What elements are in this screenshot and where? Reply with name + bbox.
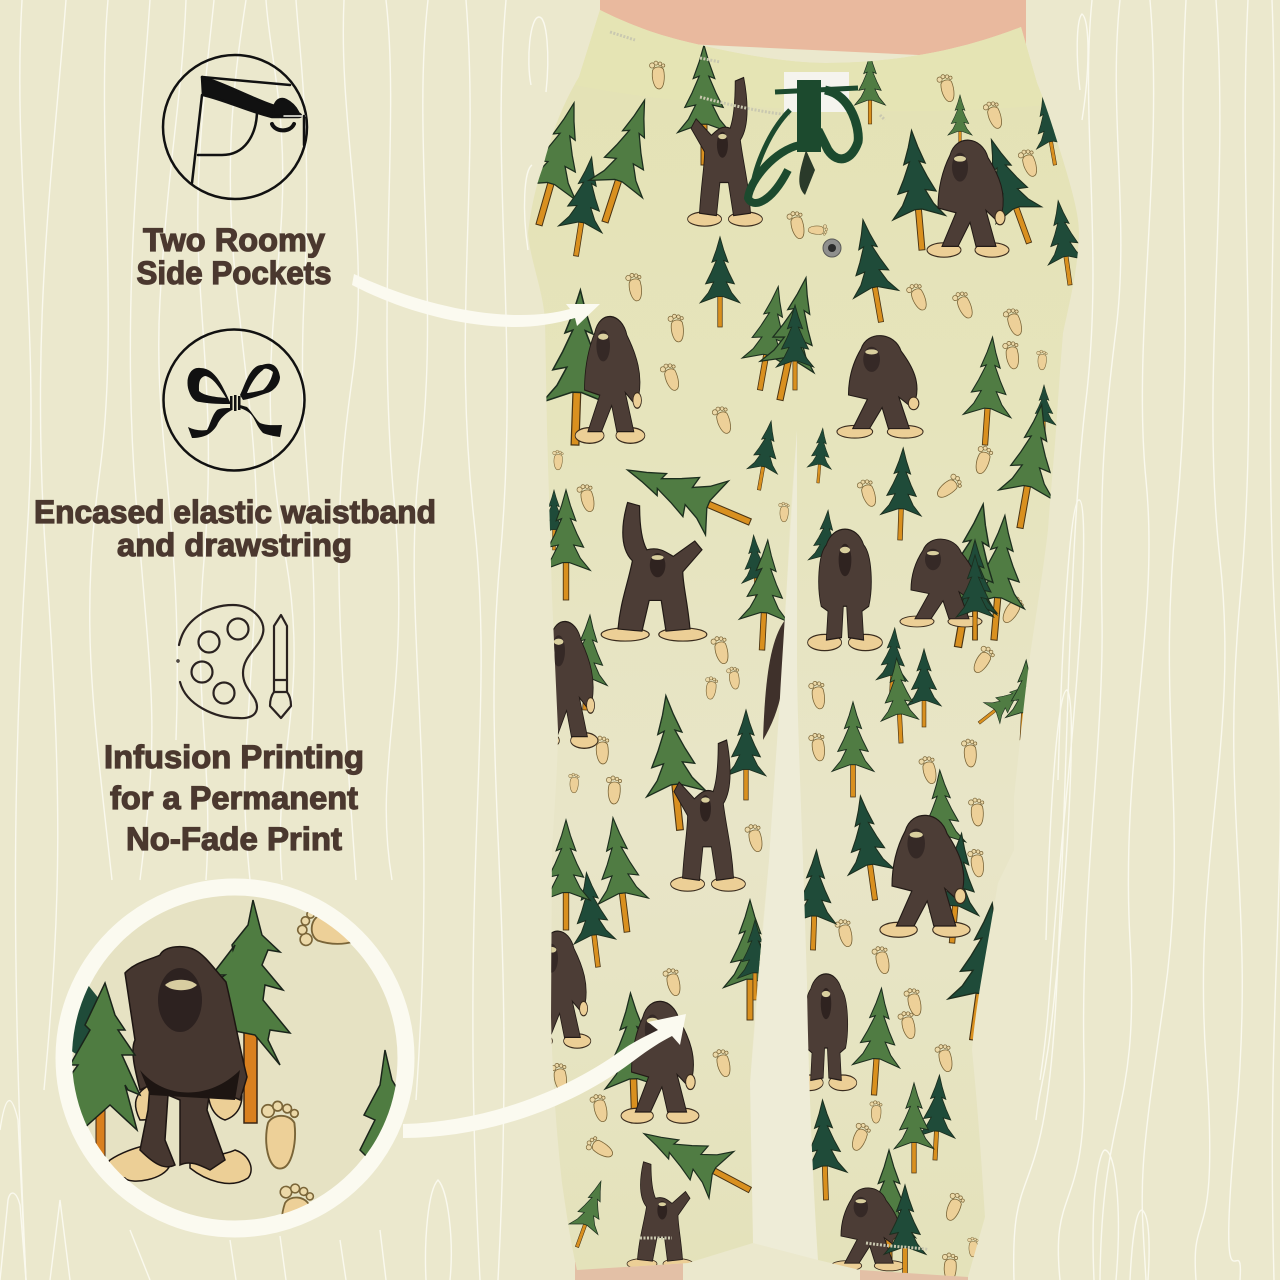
heading: two roomy side pockets bbox=[136, 222, 332, 291]
heading: two roomy side pockets: Two Roomy bbox=[143, 222, 325, 258]
icon: side pocket bbox=[163, 55, 307, 199]
icon: bow drawstring bbox=[164, 330, 304, 470]
print: footprints bbox=[550, 60, 1047, 1280]
heading: infusion printing: for a Permanent bbox=[110, 780, 358, 816]
inset: bigfoot bbox=[108, 947, 251, 1183]
inset: right pine tree bbox=[212, 900, 290, 1123]
inset: left pine tree bbox=[72, 981, 142, 1157]
print: pine trees bbox=[512, 45, 1089, 1270]
heading: encased elastic waistband and drawstring bbox=[34, 494, 436, 563]
heading: infusion printing: No-Fade Print bbox=[126, 821, 342, 857]
photo: torso skin above waistband bbox=[600, 0, 1026, 60]
photo: bigfoot pajama pants bbox=[512, 0, 1089, 1280]
drawstring tie bbox=[748, 72, 858, 203]
inset: far right pine tree bbox=[359, 1050, 396, 1156]
gap between the legs bbox=[750, 430, 818, 1260]
inset: footprints bbox=[260, 912, 351, 1214]
arrow: from magnified circle bbox=[403, 1014, 686, 1138]
heading: two roomy side pockets: Side Pockets bbox=[136, 255, 332, 291]
photo: ankles bbox=[575, 1262, 968, 1280]
icon: paint palette and brush bbox=[177, 605, 291, 718]
heading: infusion printing: Infusion Printing bbox=[104, 739, 364, 775]
print: dark tree over bigfoot clusters bbox=[884, 555, 994, 1280]
callout: magnified print circle bbox=[60, 887, 410, 1247]
heading: encased elastic waistband and drawstring: Encased elastic waistband bbox=[34, 494, 436, 530]
inset: dark tree at edge bbox=[72, 986, 98, 1054]
waistband stitching bbox=[610, 32, 928, 1250]
heading: encased elastic waistband and drawstring: and drawstring bbox=[117, 527, 352, 563]
heading: infusion printing bbox=[104, 739, 364, 857]
arrow: to pocket bbox=[352, 274, 600, 327]
print: bigfoot figures bbox=[525, 77, 1009, 1271]
waistband bbox=[600, 10, 1026, 55]
fly button bbox=[823, 239, 841, 257]
